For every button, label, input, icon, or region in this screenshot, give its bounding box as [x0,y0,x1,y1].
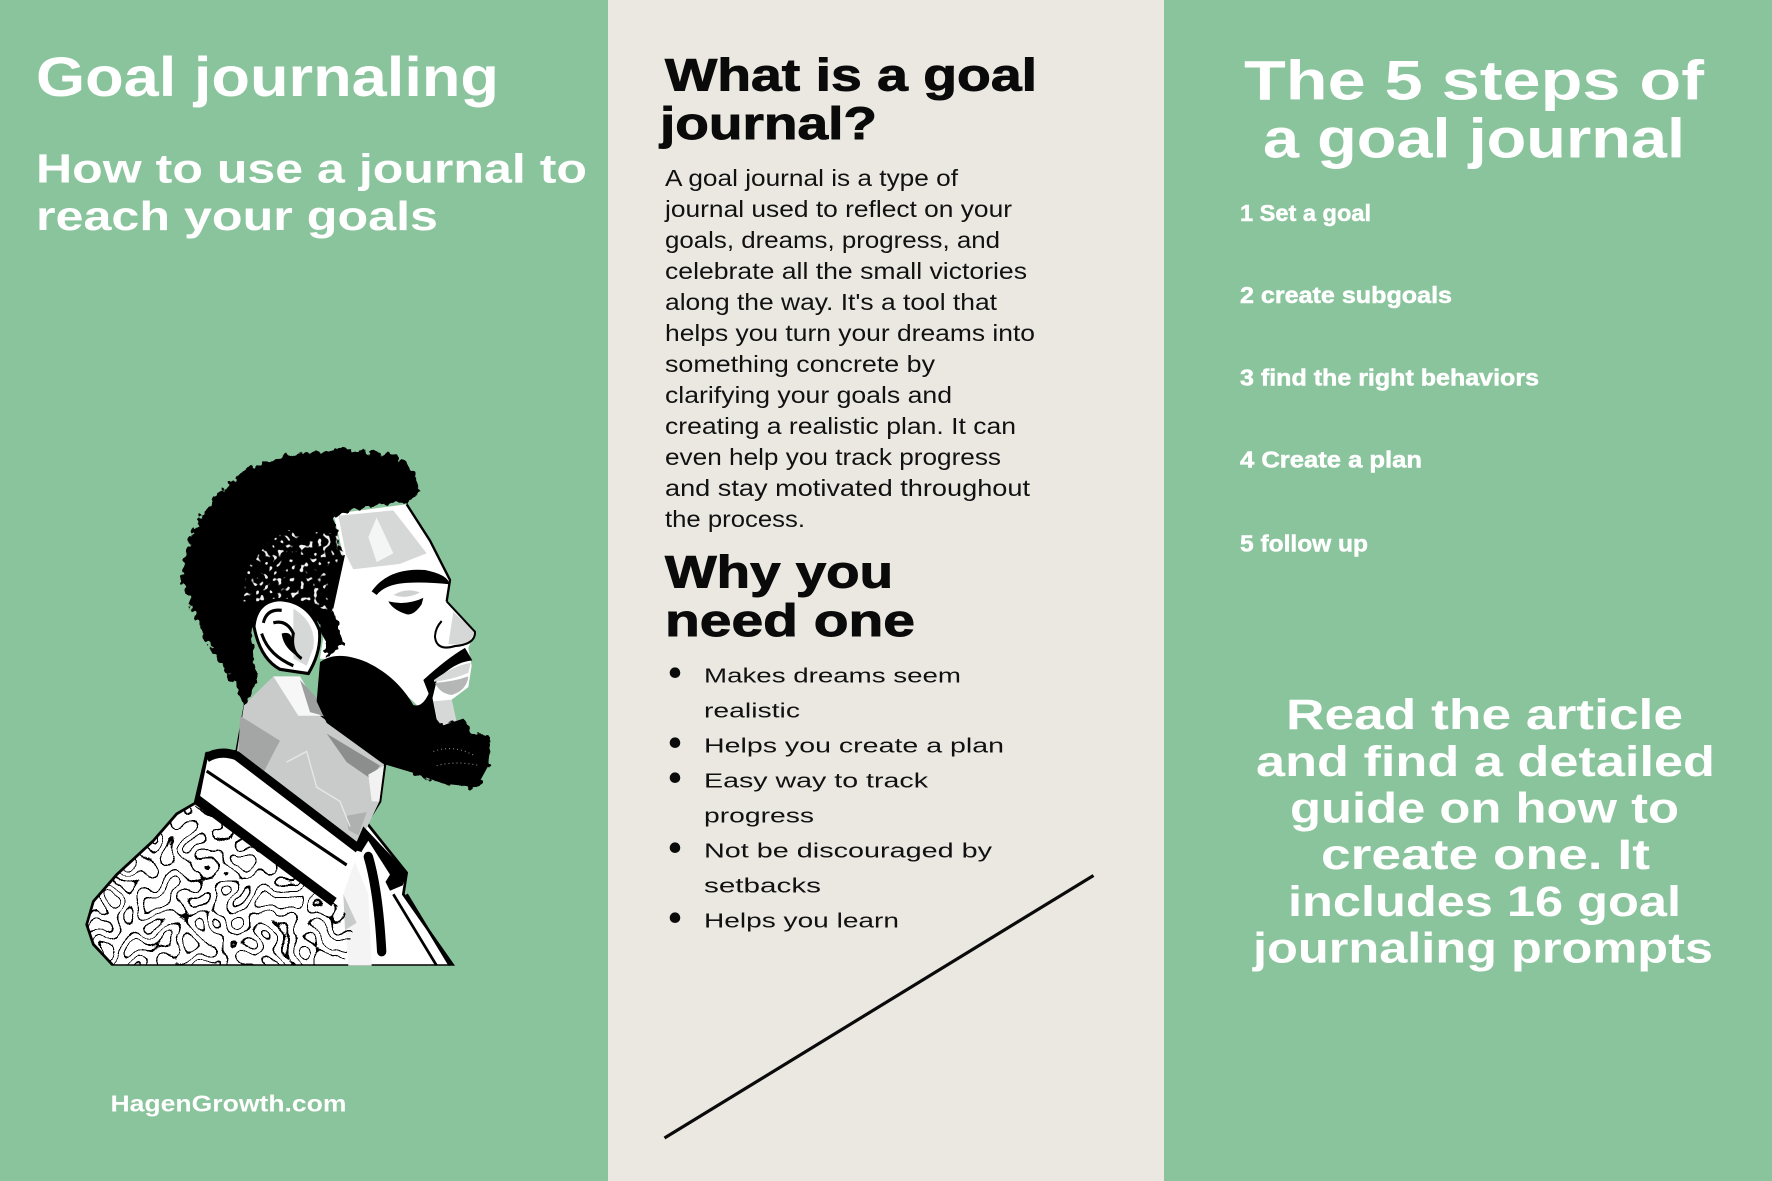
subtitle: reach your goals [36,193,438,239]
bullet list: setbacks [704,875,821,898]
heading: what is a goal journal [659,50,1037,149]
steps list: 2 create subgoals [1240,282,1452,308]
bullet list: progress [704,805,814,828]
bullet list: Helps you create a plan [704,735,1004,758]
body paragraph: helps you turn your dreams into [665,320,1035,346]
panel: cover [38,56,585,1116]
body paragraph: A goal journal is a type of [665,165,959,191]
bullet list [670,665,1004,933]
neck [237,676,384,846]
collar and placket [207,753,358,849]
heading: why you need one: Why you [665,546,893,598]
body paragraph: creating a realistic plan. It can [665,413,1016,439]
body paragraph: along the way. It's a tool that [665,289,998,315]
steps list: 3 find the right behaviors [1240,364,1539,390]
call to action: Read the article [1286,691,1683,739]
bullet list: Easy way to track [704,770,929,793]
eyebrow [372,570,449,595]
heading: the 5 steps: The 5 steps of [1244,48,1704,111]
call to action: includes 16 goal [1288,878,1681,926]
call to action: and find a detailed [1256,738,1715,786]
heading: what is a goal journal: journal? [659,98,877,149]
body paragraph: the process. [665,506,805,532]
steps list: 4 Create a plan [1240,446,1422,472]
body paragraph: celebrate all the small victories [665,258,1027,284]
nose [435,601,475,648]
bullet list: realistic [704,700,800,723]
face [320,504,475,726]
heading: the 5 steps: a goal journal [1263,106,1685,169]
panel: explanation [608,0,1164,1181]
illustration: bearded man in profile [80,450,490,969]
call to action: create one. It [1321,831,1650,879]
body paragraph: and stay motivated throughout [665,475,1031,501]
heading: why you need one: need one [665,595,915,646]
beard [317,656,490,787]
title: Goal journaling [36,45,499,108]
body paragraph: something concrete by [665,351,936,377]
bullet list: Helps you learn [704,910,899,933]
body paragraph: clarifying your goals and [665,382,952,408]
heading: the 5 steps [1244,48,1704,169]
diagonal line [664,876,1094,1138]
body silhouette [87,705,453,966]
eye [388,598,423,614]
call to action: guide on how to [1290,785,1679,833]
call to action: journaling prompts [1252,925,1713,973]
moustache and lips [423,648,472,701]
body paragraph: goals, dreams, progress, and [665,227,1000,253]
hair [183,450,419,705]
call to action [1252,691,1715,973]
heading: what is a goal journal: What is a goal [665,50,1037,100]
subtitle [36,146,587,239]
ear [254,600,320,674]
heading: why you need one [665,546,915,646]
steps list [1240,200,1539,556]
steps list: 1 Set a goal [1240,200,1371,226]
panel: steps [1164,0,1772,1181]
body paragraph [664,165,1035,532]
website url: HagenGrowth.com [110,1090,346,1116]
bullet list: Not be discouraged by [704,840,993,863]
body paragraph: even help you track progress [665,444,1001,470]
bullet list: Makes dreams seem [704,665,961,688]
body paragraph: journal used to reflect on your [664,196,1012,222]
jacket pattern [88,806,353,966]
subtitle: How to use a journal to [36,146,587,192]
steps list: 5 follow up [1240,530,1368,556]
hair fade speckle [243,530,344,612]
